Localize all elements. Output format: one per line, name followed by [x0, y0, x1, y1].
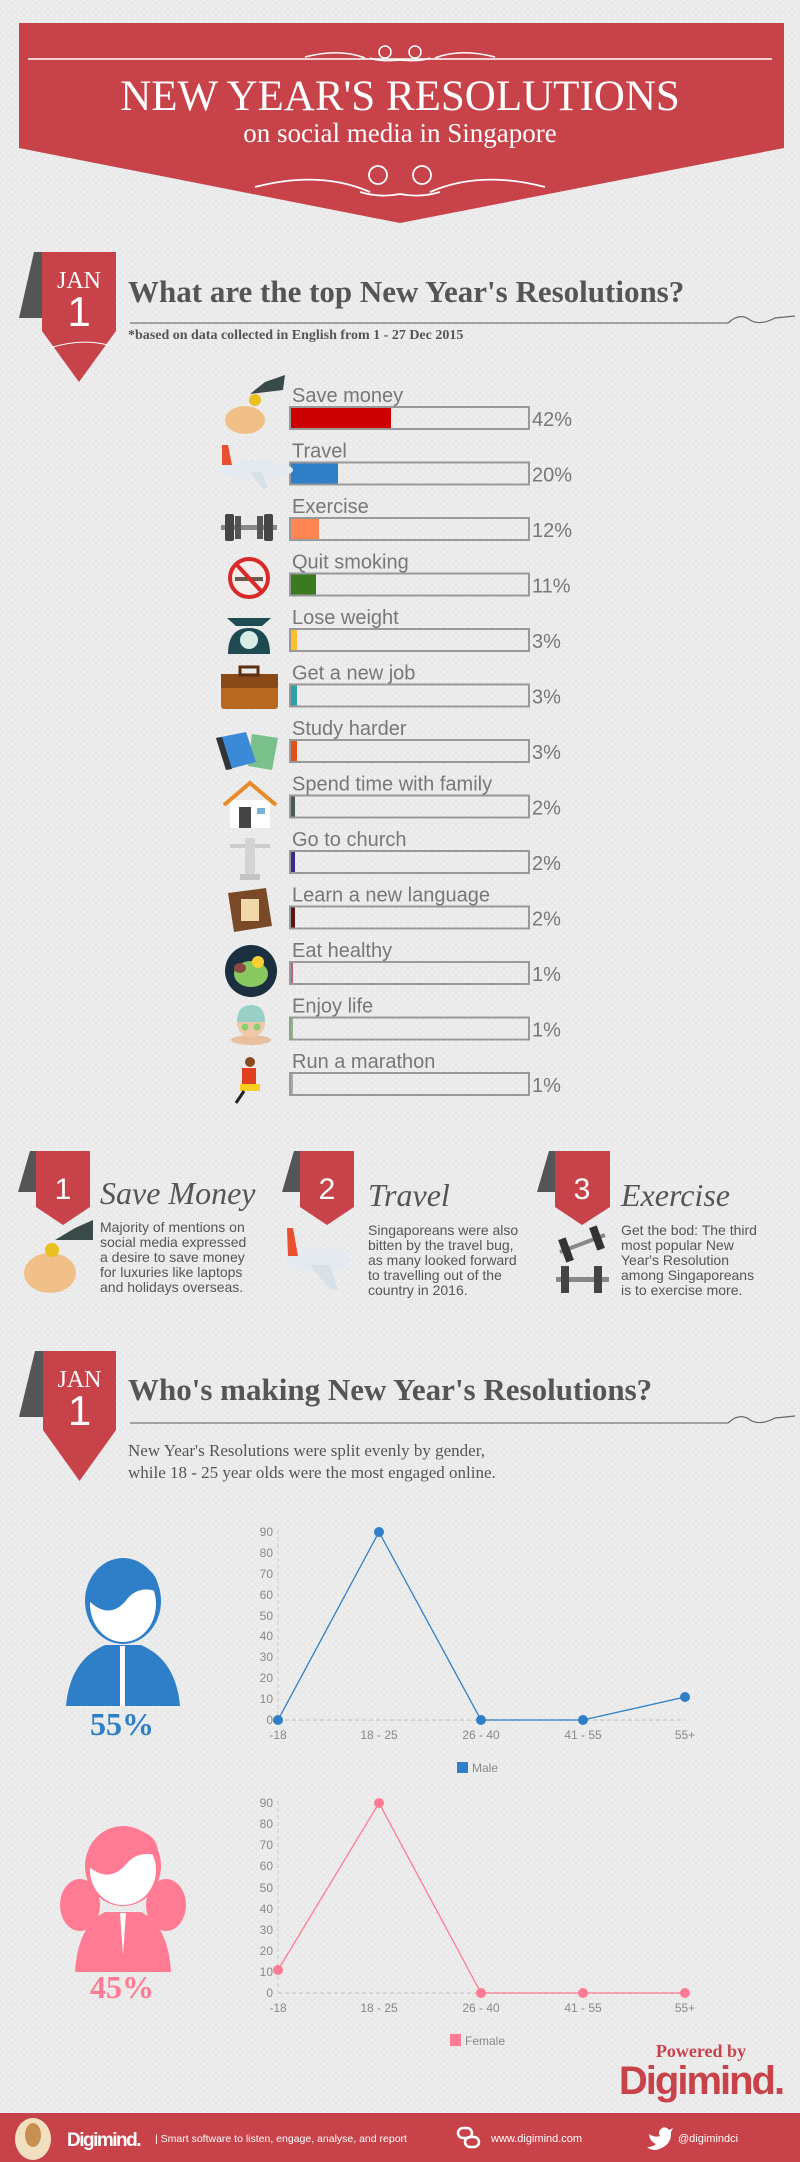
heading: who's making: [128, 1372, 795, 1423]
row: study harder: [216, 718, 561, 770]
description: New Year's Resolutions were split evenly by gender,: [128, 1441, 485, 1460]
row: lose weight: [227, 607, 561, 654]
row: study harder: 3%: [532, 742, 561, 764]
ribbon: JAN 1 section 1: [19, 252, 116, 382]
card: 3 exercise: 3: [574, 1173, 590, 1206]
row: run a marathon: 1%: [532, 1075, 561, 1097]
row: spend time with family: [224, 774, 561, 828]
card: 3 exercise: among Singaporeans: [621, 1267, 754, 1283]
card: 3 exercise: Exercise: [620, 1177, 730, 1213]
card: 2 travel: bitten by the travel bug,: [368, 1237, 514, 1253]
footer: @digimindci: [678, 2133, 738, 2145]
card: 1 save money: for luxuries like laptops: [100, 1264, 242, 1280]
card: 3 exercise: Year's Resolution: [621, 1252, 729, 1268]
line chart: male: 10: [260, 1692, 273, 1706]
card: 3 exercise: Get the bod: The third: [621, 1222, 757, 1238]
line chart: female: 20: [260, 1944, 273, 1958]
row: go to church: Go to church: [292, 829, 407, 851]
row: travel: 20%: [532, 464, 572, 486]
ribbon: JAN 1 section 2: JAN: [57, 1367, 102, 1393]
heading: top resolutions: [128, 274, 795, 323]
row: travel: [217, 440, 572, 488]
icon: female figure: [60, 1826, 186, 1972]
row: enjoy life: 1%: [532, 1020, 561, 1042]
footer: [0, 2113, 800, 2162]
row: go to church: [230, 829, 561, 880]
line chart: female: Female: [465, 2034, 505, 2048]
card: 1 save money: social media expressed: [100, 1234, 246, 1250]
line chart: male: 55+: [675, 1728, 695, 1742]
line chart: male: 26 - 40: [462, 1728, 500, 1742]
line chart: male: [260, 1525, 695, 1775]
row: learn a new language: Learn a new language: [292, 884, 490, 906]
row: spend time with family: Spend time with family: [292, 774, 492, 796]
line chart: female: 60: [260, 1859, 273, 1873]
card: 1 save money: and holidays overseas.: [100, 1279, 243, 1295]
row: get a new job: Get a new job: [292, 662, 415, 684]
line chart: female: -18: [269, 2001, 287, 2015]
powered by: Powered by: [656, 2041, 746, 2061]
row: eat healthy: 1%: [532, 964, 561, 986]
line chart: female: 80: [260, 1817, 273, 1831]
card: 2 travel: 2: [319, 1173, 335, 1206]
row: run a marathon: [236, 1051, 561, 1103]
bar chart: resolutions: [216, 375, 572, 1103]
row: get a new job: 3%: [532, 686, 561, 708]
card: 1 save money: 1: [55, 1173, 71, 1206]
card: 2 travel: to travelling out of the: [368, 1267, 502, 1283]
card: 2 travel: country in 2016.: [368, 1282, 468, 1298]
row: save money: 42%: [532, 409, 572, 431]
ribbon: JAN 1 section 1: 1: [67, 288, 91, 335]
female percentage: 45%: [90, 1969, 154, 2005]
subtitle: on social media in Singapore: [243, 118, 557, 148]
ornament: bottom: [255, 166, 545, 196]
card: 1 save money: a desire to save money: [100, 1249, 245, 1265]
row: quit smoking: 11%: [532, 576, 571, 598]
card: 2 travel: as many looked forward: [368, 1252, 517, 1268]
row: exercise: 12%: [532, 520, 572, 542]
note: *based on data collected in English from 1 - 27 Dec 2015: [128, 328, 463, 343]
line chart: female: 40: [260, 1902, 273, 1916]
row: save money: [225, 375, 572, 434]
line chart: female: 0: [266, 1986, 273, 2000]
line chart: male: 80: [260, 1546, 273, 1560]
line chart: male: 60: [260, 1588, 273, 1602]
line chart: male: Male: [472, 1761, 498, 1775]
row: learn a new language: [228, 884, 561, 932]
line chart: female: 90: [260, 1796, 273, 1810]
card: 2 travel: Singaporeans were also: [368, 1222, 518, 1238]
line chart: female: 50: [260, 1881, 273, 1895]
icon: piggy bank: [24, 1220, 93, 1293]
line chart: male: 0: [266, 1713, 273, 1727]
line chart: male: 50: [260, 1609, 273, 1623]
ribbon: JAN 1 section 2: [19, 1351, 116, 1481]
card: 2 travel: [282, 1151, 518, 1298]
line chart: female: 41 - 55: [564, 2001, 602, 2015]
line chart: male: 30: [260, 1650, 273, 1664]
icon: dumbbells: [556, 1225, 609, 1293]
card: 1 save money: [18, 1151, 256, 1295]
row: quit smoking: Quit smoking: [292, 552, 409, 574]
row: learn a new language: 2%: [532, 908, 561, 930]
ribbon: JAN 1 section 2: 1: [68, 1387, 91, 1434]
card: 3 exercise: [537, 1151, 757, 1298]
line chart: male: -18: [269, 1728, 287, 1742]
card: 3 exercise: most popular New: [621, 1237, 735, 1253]
line chart: male: 40: [260, 1629, 273, 1643]
card: 1 save money: Save Money: [100, 1175, 256, 1211]
heading: top resolutions: What are the top New Year's Resolutions?: [128, 274, 684, 309]
footer: Digimind.: [67, 2130, 140, 2151]
line chart: female: 30: [260, 1923, 273, 1937]
row: quit smoking: [230, 552, 571, 598]
heading: who's making: Who's making New Year's Resolutions?: [128, 1372, 652, 1407]
icon: plane: [286, 1228, 350, 1290]
row: travel: Travel: [292, 440, 347, 462]
row: spend time with family: 2%: [532, 798, 561, 820]
row: go to church: 2%: [532, 853, 561, 875]
row: lose weight: Lose weight: [292, 607, 399, 629]
line chart: male: 18 - 25: [360, 1728, 398, 1742]
row: lose weight: 3%: [532, 631, 561, 653]
title: NEW YEAR'S RESOLUTIONS: [120, 73, 680, 120]
ribbon: JAN 1 section 1: JAN: [57, 268, 101, 294]
row: enjoy life: Enjoy life: [292, 996, 373, 1018]
line chart: female: 26 - 40: [462, 2001, 500, 2015]
row: exercise: Exercise: [292, 496, 369, 518]
card: 1 save money: Majority of mentions on: [100, 1219, 245, 1235]
footer: www.digimind.com: [490, 2133, 582, 2145]
header banner: [19, 23, 784, 223]
line chart: female: 55+: [675, 2001, 695, 2015]
line chart: male: 20: [260, 1671, 273, 1685]
row: get a new job: [221, 662, 561, 709]
row: run a marathon: Run a marathon: [292, 1051, 435, 1073]
icon: mascot: [15, 2118, 51, 2160]
male percentage: 55%: [90, 1706, 154, 1742]
line chart: female: 10: [260, 1965, 273, 1979]
icon: twitter: [647, 2127, 673, 2150]
row: save money: Save money: [292, 385, 403, 407]
icon: male figure: [66, 1558, 180, 1706]
card: 3 exercise: is to exercise more.: [621, 1282, 742, 1298]
footer: | Smart software to listen, engage, analyse, and report: [155, 2133, 407, 2145]
line chart: male: 41 - 55: [564, 1728, 602, 1742]
line chart: male: 70: [260, 1567, 273, 1581]
row: eat healthy: Eat healthy: [292, 940, 392, 962]
card: 2 travel: Travel: [368, 1177, 450, 1213]
powered by: Digimind.: [619, 2059, 783, 2103]
ornament: top: [305, 46, 495, 61]
line chart: male: 90: [260, 1525, 273, 1539]
row: study harder: Study harder: [292, 718, 407, 740]
icon: link: [458, 2128, 479, 2147]
row: eat healthy: [225, 940, 561, 997]
row: exercise: [221, 496, 572, 542]
description: while 18 - 25 year olds were the most engaged online.: [128, 1463, 496, 1482]
line chart: female: 18 - 25: [360, 2001, 398, 2015]
line chart: female: [260, 1796, 695, 2048]
row: enjoy life: [231, 996, 561, 1045]
line chart: female: 70: [260, 1838, 273, 1852]
